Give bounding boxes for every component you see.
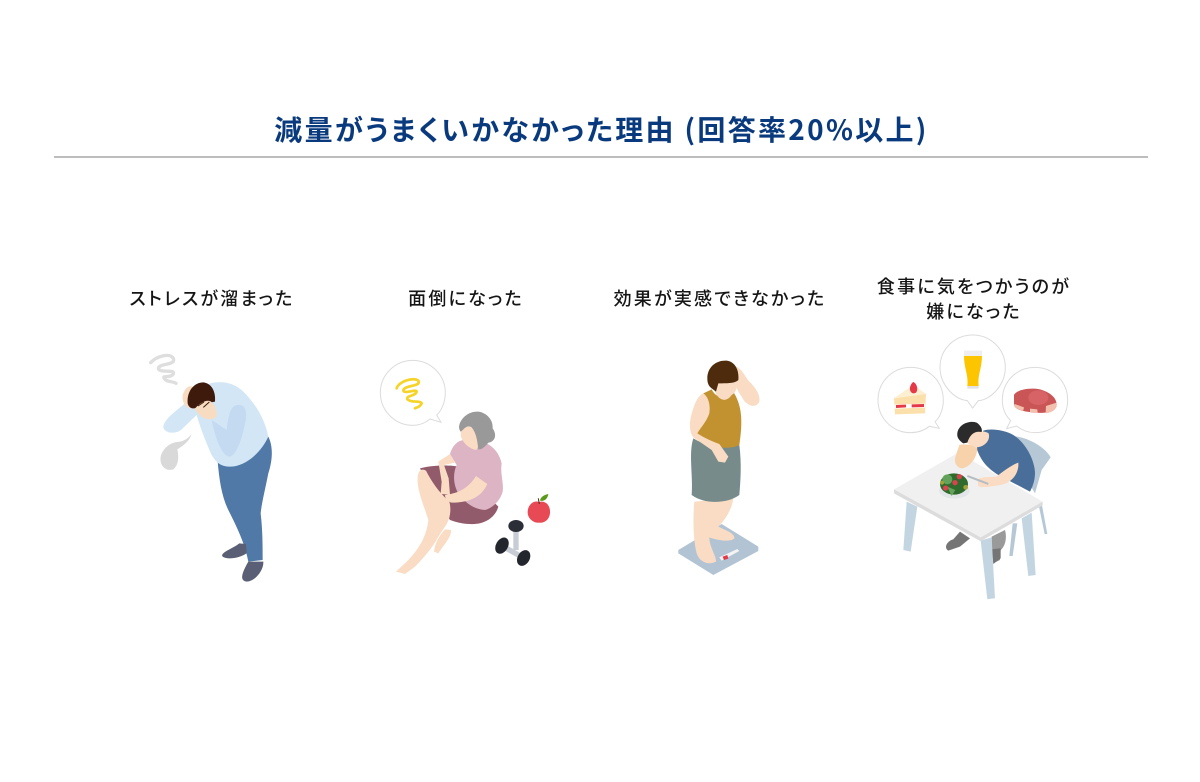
- bubble: cake: [878, 367, 943, 433]
- illustration: stressed man: [151, 355, 272, 582]
- head: [967, 431, 989, 447]
- bubble: beer: [940, 335, 1005, 408]
- arm with fork: [977, 463, 1018, 487]
- dumbbells: [492, 520, 533, 568]
- caption: no effect: 効果が実感できなかった: [614, 285, 826, 311]
- legs of man: [946, 532, 970, 551]
- caption: food restriction: 嫌になった: [926, 298, 1022, 324]
- title: 減量がうまくいかなかった理由 (回答率20%以上): [274, 109, 929, 149]
- scale: [678, 524, 758, 575]
- table: [894, 453, 1043, 599]
- caption: food restriction: [877, 273, 1071, 324]
- caption: food restriction: 食事に気をつかうのが: [877, 273, 1071, 299]
- illustration: woman on scale: [678, 361, 760, 575]
- caption: bother: 面倒になった: [408, 285, 524, 311]
- torso: [977, 429, 1035, 492]
- illustration: seated woman: [380, 360, 550, 574]
- speech bubble with scribble: [380, 360, 445, 425]
- salad: [939, 473, 970, 499]
- caption: stress: ストレスが溜まった: [130, 285, 294, 311]
- illustration: man at table: [878, 335, 1068, 599]
- bubble: steak: [1002, 367, 1068, 433]
- chair: [1009, 436, 1051, 556]
- apple: [528, 494, 550, 523]
